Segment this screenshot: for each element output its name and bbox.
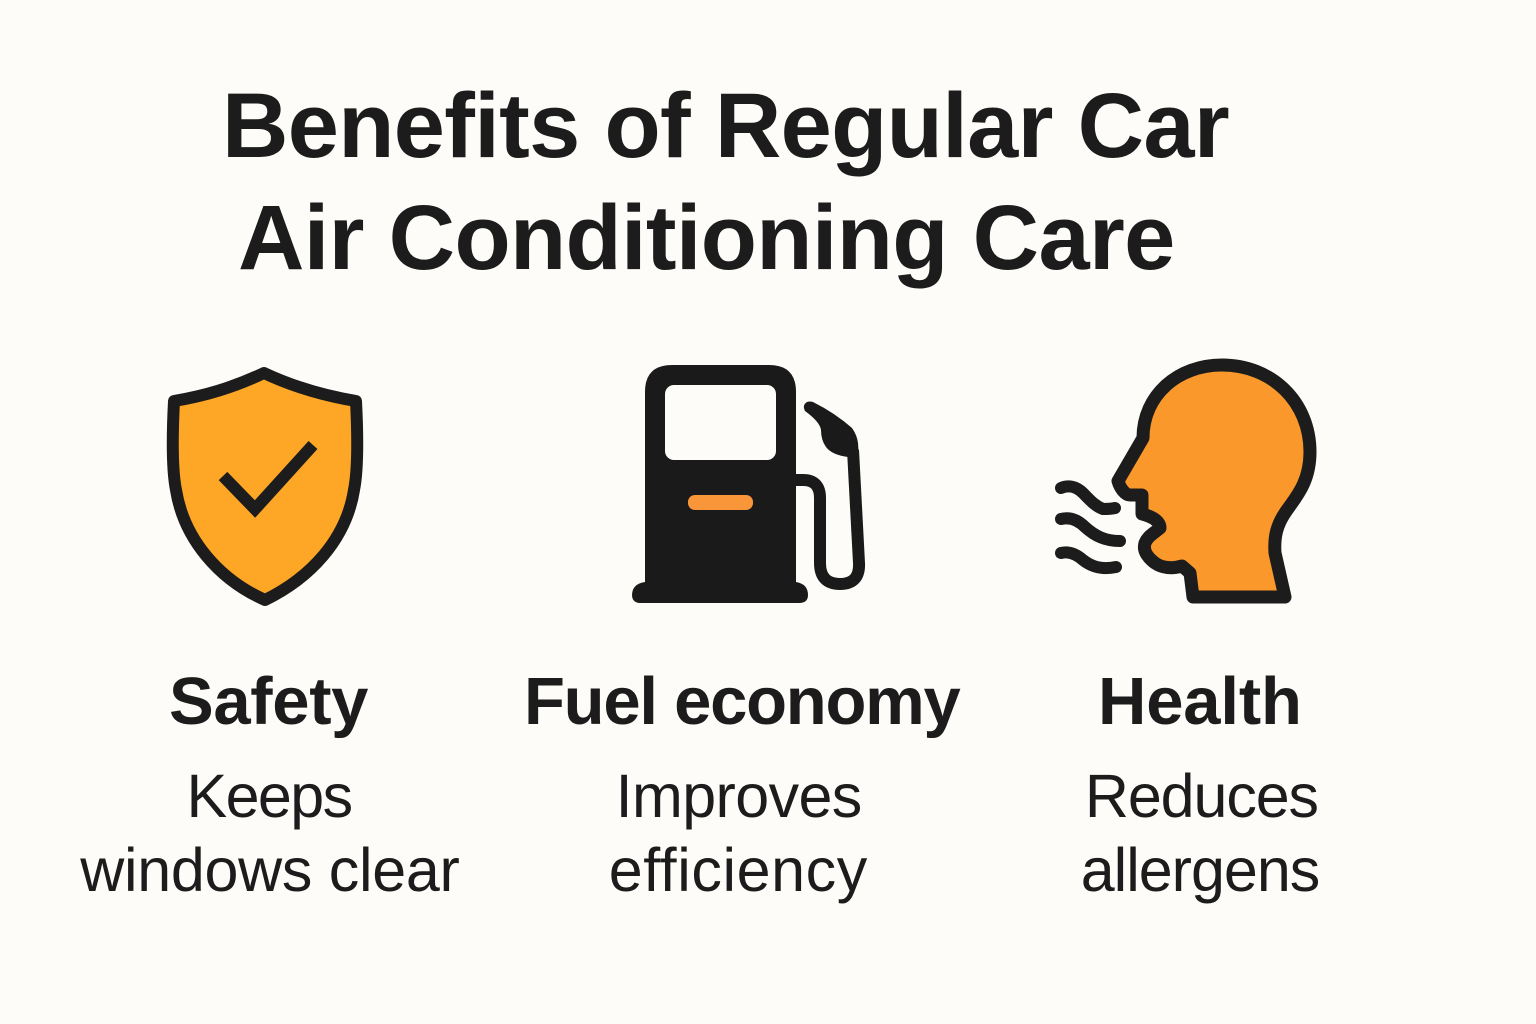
icon: fuel pump	[632, 365, 859, 603]
title: Benefits of Regular Car	[222, 75, 1229, 177]
text: health description: Reduces	[1085, 762, 1318, 830]
panel: safety	[80, 664, 460, 904]
heading: health: Health	[1098, 664, 1302, 739]
text: safety description	[80, 762, 460, 904]
text: safety description: windows clear	[80, 836, 460, 904]
heading: fuel economy: Fuel economy	[524, 664, 959, 739]
heading: safety: Safety	[169, 664, 368, 739]
icon: shield with check	[173, 373, 357, 600]
title: Air Conditioning Care	[238, 187, 1175, 289]
title	[222, 75, 1229, 289]
text: health description	[1081, 762, 1319, 904]
panel: fuel economy	[524, 664, 960, 904]
text: fuel economy description	[609, 762, 868, 904]
text: health description: allergens	[1081, 836, 1319, 904]
text: fuel economy description: Improves	[616, 762, 862, 830]
text: fuel economy description: efficiency	[609, 836, 868, 904]
panel: health	[1081, 664, 1319, 904]
text: safety description: Keeps	[187, 762, 351, 830]
icon: head breathing	[1061, 365, 1310, 597]
